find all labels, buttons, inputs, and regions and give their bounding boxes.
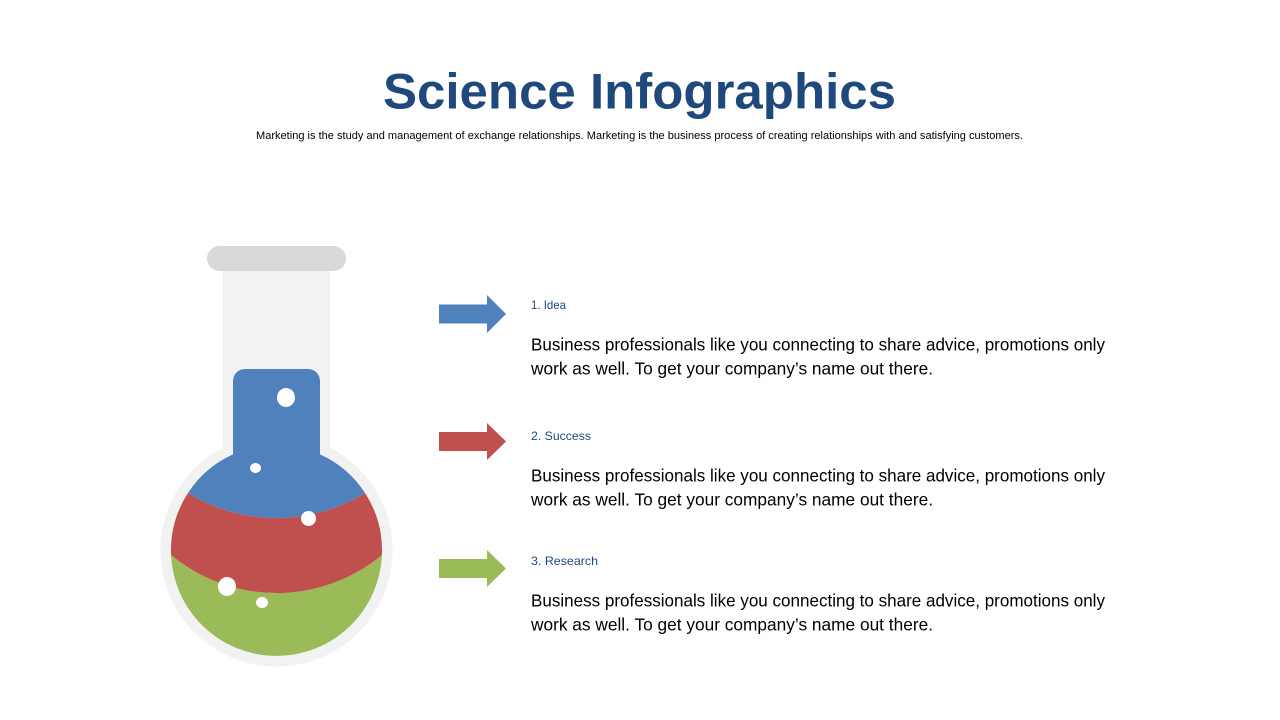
item 3 description: Business professionals like you connecting to share advice, promotions only [531, 590, 1105, 610]
item 3 description [530, 590, 1105, 634]
item 1 description: Business professionals like you connecting to share advice, promotions only [531, 334, 1105, 354]
arrow: green [439, 550, 506, 587]
item 1: idea [530, 298, 1105, 378]
item 1 label: 1. Idea [531, 298, 566, 312]
item 2 description: work as well. To get your company’s name out there. [530, 490, 933, 510]
item 1 description: work as well. To get your company’s name out there. [530, 358, 933, 378]
flask glass body [160, 271, 392, 666]
item 2 description [530, 466, 1105, 510]
arrow: red [439, 423, 506, 460]
bubbles [218, 388, 316, 608]
item 2 description: Business professionals like you connecting to share advice, promotions only [531, 466, 1105, 486]
red liquid layer [171, 493, 382, 593]
item 2 label: 2. Success [531, 429, 591, 443]
flask illustration [160, 246, 392, 666]
subtitle: Marketing is the study and management of exchange relationships. Marketing is the business process of creating relationships with and satisfying customers. [256, 130, 1023, 142]
blue liquid layer [188, 369, 365, 518]
arrow: blue [439, 295, 506, 333]
item 3 label: 3. Research [531, 554, 598, 568]
flask cap [207, 246, 346, 271]
green liquid layer [171, 555, 382, 656]
title: Science Infographics [383, 64, 896, 120]
item 3: research [530, 554, 1105, 634]
item 3 description: work as well. To get your company’s name out there. [530, 614, 933, 634]
item 1 description [530, 334, 1105, 378]
item 2: success [530, 429, 1105, 510]
